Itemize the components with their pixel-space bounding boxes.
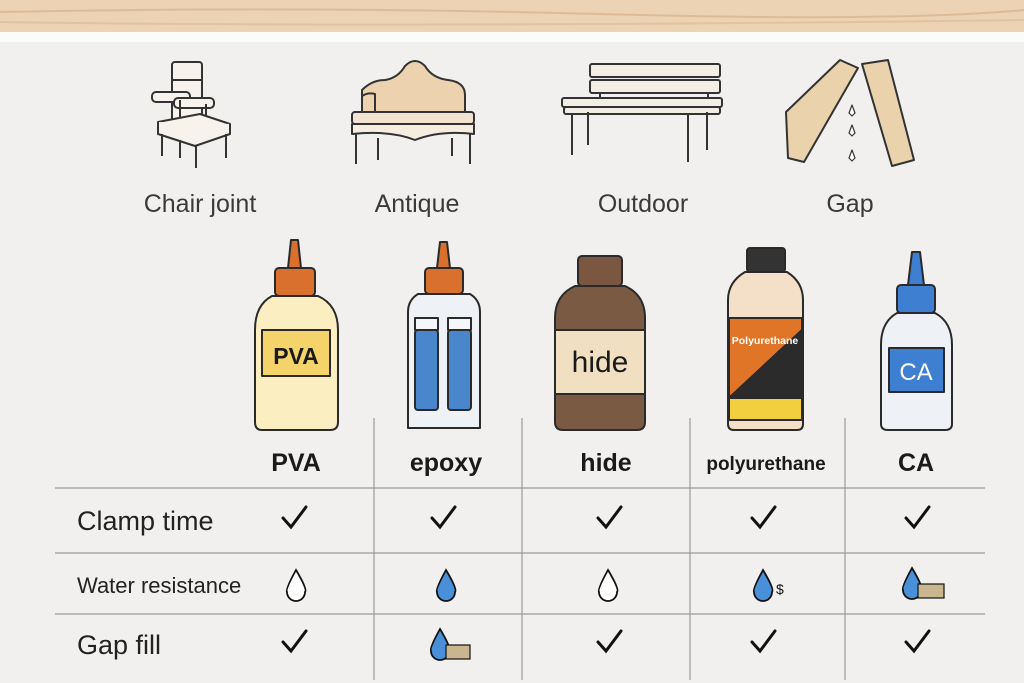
- table header: PVA: [271, 449, 321, 477]
- table grid: [55, 418, 985, 680]
- row labels: Gap fill: [77, 630, 161, 660]
- bottle: epoxy: [408, 242, 480, 428]
- table header: hide: [580, 449, 632, 477]
- bottle: hide: [555, 256, 645, 430]
- icon labels: Chair joint: [144, 190, 256, 218]
- checkmarks: [283, 507, 929, 651]
- bottle: polyurethane: [728, 248, 803, 430]
- bottle: PVA: PVA: [273, 343, 319, 369]
- icon labels: Antique: [375, 190, 459, 218]
- water drops: [287, 568, 944, 660]
- row labels: Clamp time: [77, 506, 214, 536]
- bottle: CA: CA: [899, 359, 933, 386]
- bottle: CA: [881, 252, 952, 430]
- table header: CA: [898, 449, 934, 477]
- icon: chair: [152, 62, 230, 168]
- icon labels: Gap: [826, 190, 874, 218]
- icon: bench: [562, 64, 722, 162]
- bottle: PVA: [255, 240, 338, 430]
- icon labels: [144, 190, 874, 218]
- icon: antique chair: [352, 61, 474, 164]
- bottle: hide: hide: [572, 346, 628, 379]
- table header: polyurethane: [706, 454, 826, 475]
- table header: epoxy: [410, 449, 482, 477]
- row labels: Water resistance: [77, 573, 241, 598]
- icon: gap blocks: [786, 60, 914, 166]
- water drops: $: [776, 581, 784, 597]
- icon labels: Outdoor: [598, 190, 688, 218]
- wood strip: [0, 0, 1024, 32]
- table header: [271, 449, 934, 477]
- bottle: polyurethane: Polyurethane: [732, 335, 798, 347]
- row labels: [77, 506, 241, 660]
